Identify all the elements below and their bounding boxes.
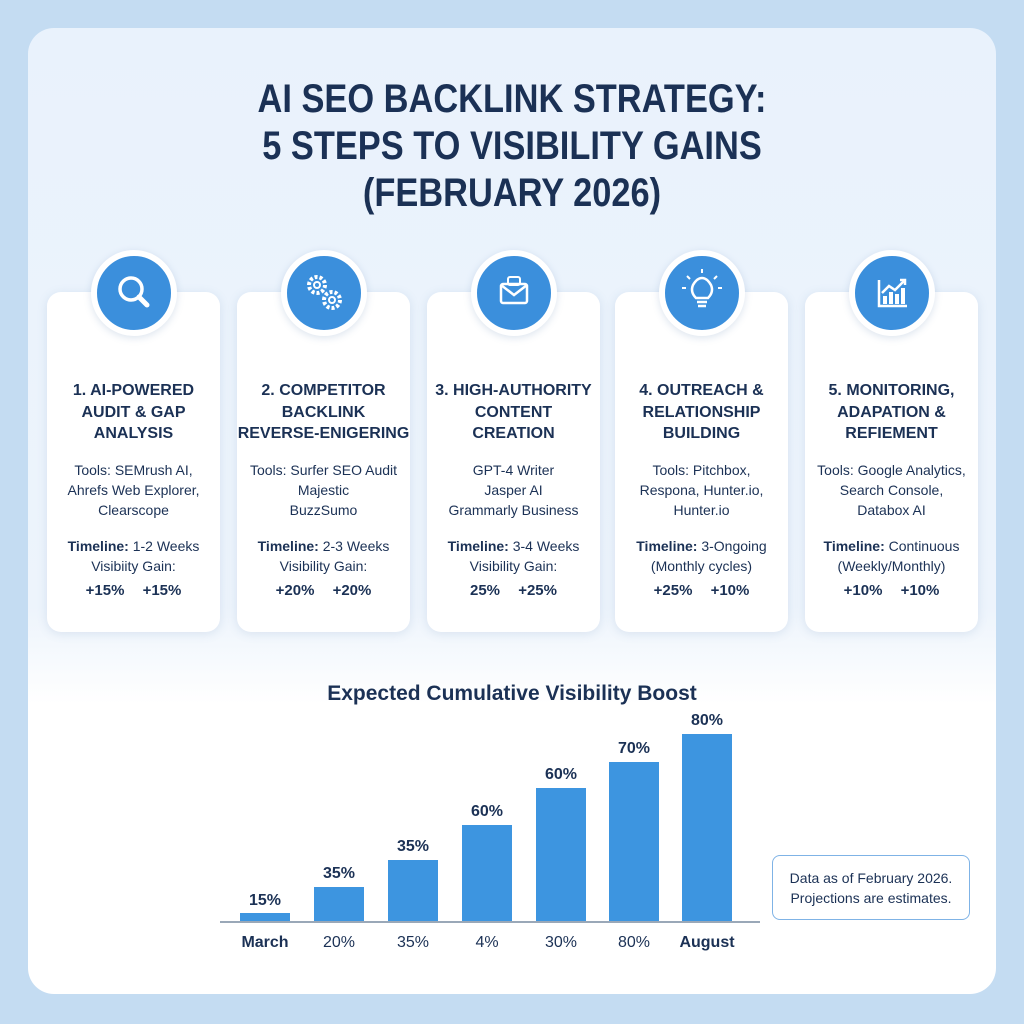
card 3 xyxy=(427,292,600,632)
bar chart: 35% xyxy=(397,838,429,855)
card 4: +25% +10% xyxy=(654,582,749,599)
card 3: CREATION xyxy=(472,425,555,442)
card 5 xyxy=(805,292,978,632)
icon: magnifier xyxy=(91,250,177,336)
note box xyxy=(772,855,970,920)
bar chart: 80% xyxy=(618,934,650,951)
card 5: 5. MONITORING, xyxy=(829,382,954,399)
card 4: BUILDING xyxy=(663,425,740,442)
bar chart: 20% xyxy=(323,934,355,951)
card 5: (Weekly/Monthly) xyxy=(838,558,945,574)
card 5: ADAPATION & xyxy=(837,404,946,420)
card 2: BACKLINK xyxy=(282,404,365,420)
icon: envelope xyxy=(471,250,557,336)
bar chart: 70% xyxy=(618,740,650,757)
card 2: BuzzSumo xyxy=(290,502,357,518)
card 3: Visibility Gain: xyxy=(470,558,557,574)
icon: chart xyxy=(849,250,935,336)
card 1: Tools: SEMrush AI, xyxy=(74,462,193,478)
bar chart: 35% xyxy=(397,934,429,951)
title xyxy=(257,77,766,215)
card 4: Hunter.io xyxy=(673,502,730,518)
card 5: Databox AI xyxy=(857,502,926,518)
icon: lightbulb xyxy=(659,250,745,336)
bar chart: 35% xyxy=(323,865,355,882)
card 1 xyxy=(47,292,220,632)
bar chart: 60% xyxy=(545,766,577,783)
card 3: 25% +25% xyxy=(470,582,557,599)
card 2: Tools: Surfer SEO Audit xyxy=(250,462,397,478)
card 4: Tools: Pitchbox, xyxy=(652,462,751,478)
bar chart: August xyxy=(679,934,735,951)
card 4: Respona, Hunter.io, xyxy=(640,482,763,498)
card 2: REVERSE-ENIGERING xyxy=(238,425,409,442)
card 5: Timeline: Continuous xyxy=(824,538,959,554)
card 3: 3. HIGH-AUTHORITY xyxy=(435,382,592,399)
card 2: Visibility Gain: xyxy=(280,558,367,574)
card 1: ANALYSIS xyxy=(94,425,173,442)
card 2: +20% +20% xyxy=(276,582,371,599)
bar chart: 30% xyxy=(545,934,577,951)
card 1: Ahrefs Web Explorer, xyxy=(67,482,200,498)
card 4 xyxy=(615,292,788,632)
title: 5 STEPS TO VISIBILITY GAINS xyxy=(262,124,762,168)
card 4: RELATIONSHIP xyxy=(643,404,760,420)
card 3: Grammarly Business xyxy=(449,502,578,518)
card 2: 2. COMPETITOR xyxy=(261,382,386,399)
card 5: Search Console, xyxy=(840,482,943,498)
card 1: Clearscope xyxy=(98,502,169,518)
card 3: GPT-4 Writer xyxy=(473,462,554,478)
card 4: Timeline: 3-Ongoing xyxy=(636,538,767,554)
note box: Projections are estimates. xyxy=(790,890,952,906)
card 4: (Monthly cycles) xyxy=(651,558,752,574)
card 3: CONTENT xyxy=(475,404,552,420)
card 1: Timeline: 1-2 Weeks xyxy=(68,538,199,554)
bar chart: 4% xyxy=(475,934,499,951)
card 1: 1. AI-POWERED xyxy=(73,382,194,399)
chart title: Expected Cumulative Visibility Boost xyxy=(327,682,697,705)
card 3: Timeline: 3-4 Weeks xyxy=(448,538,579,554)
icon: gears xyxy=(281,250,367,336)
card 5: REFIEMENT xyxy=(845,425,938,442)
bar chart: 60% xyxy=(471,803,503,820)
card 2: Majestic xyxy=(298,482,349,498)
title: (FEBRUARY 2026) xyxy=(363,171,661,215)
card 2: Timeline: 2-3 Weeks xyxy=(258,538,389,554)
card 5: Tools: Google Analytics, xyxy=(817,462,966,478)
card 4: 4. OUTREACH & xyxy=(639,382,764,399)
card 3: Jasper AI xyxy=(484,482,543,498)
bar chart: 80% xyxy=(691,712,723,729)
card 1: Visibiity Gain: xyxy=(91,558,176,574)
card 5: +10% +10% xyxy=(844,582,939,599)
card 2 xyxy=(237,292,410,632)
card 1: +15% +15% xyxy=(86,582,181,599)
bar chart: March xyxy=(241,934,289,951)
bar chart: 15% xyxy=(249,892,281,909)
note box: Data as of February 2026. xyxy=(790,870,952,886)
card 1: AUDIT & GAP xyxy=(82,404,186,420)
title: AI SEO BACKLINK STRATEGY: xyxy=(257,77,766,121)
